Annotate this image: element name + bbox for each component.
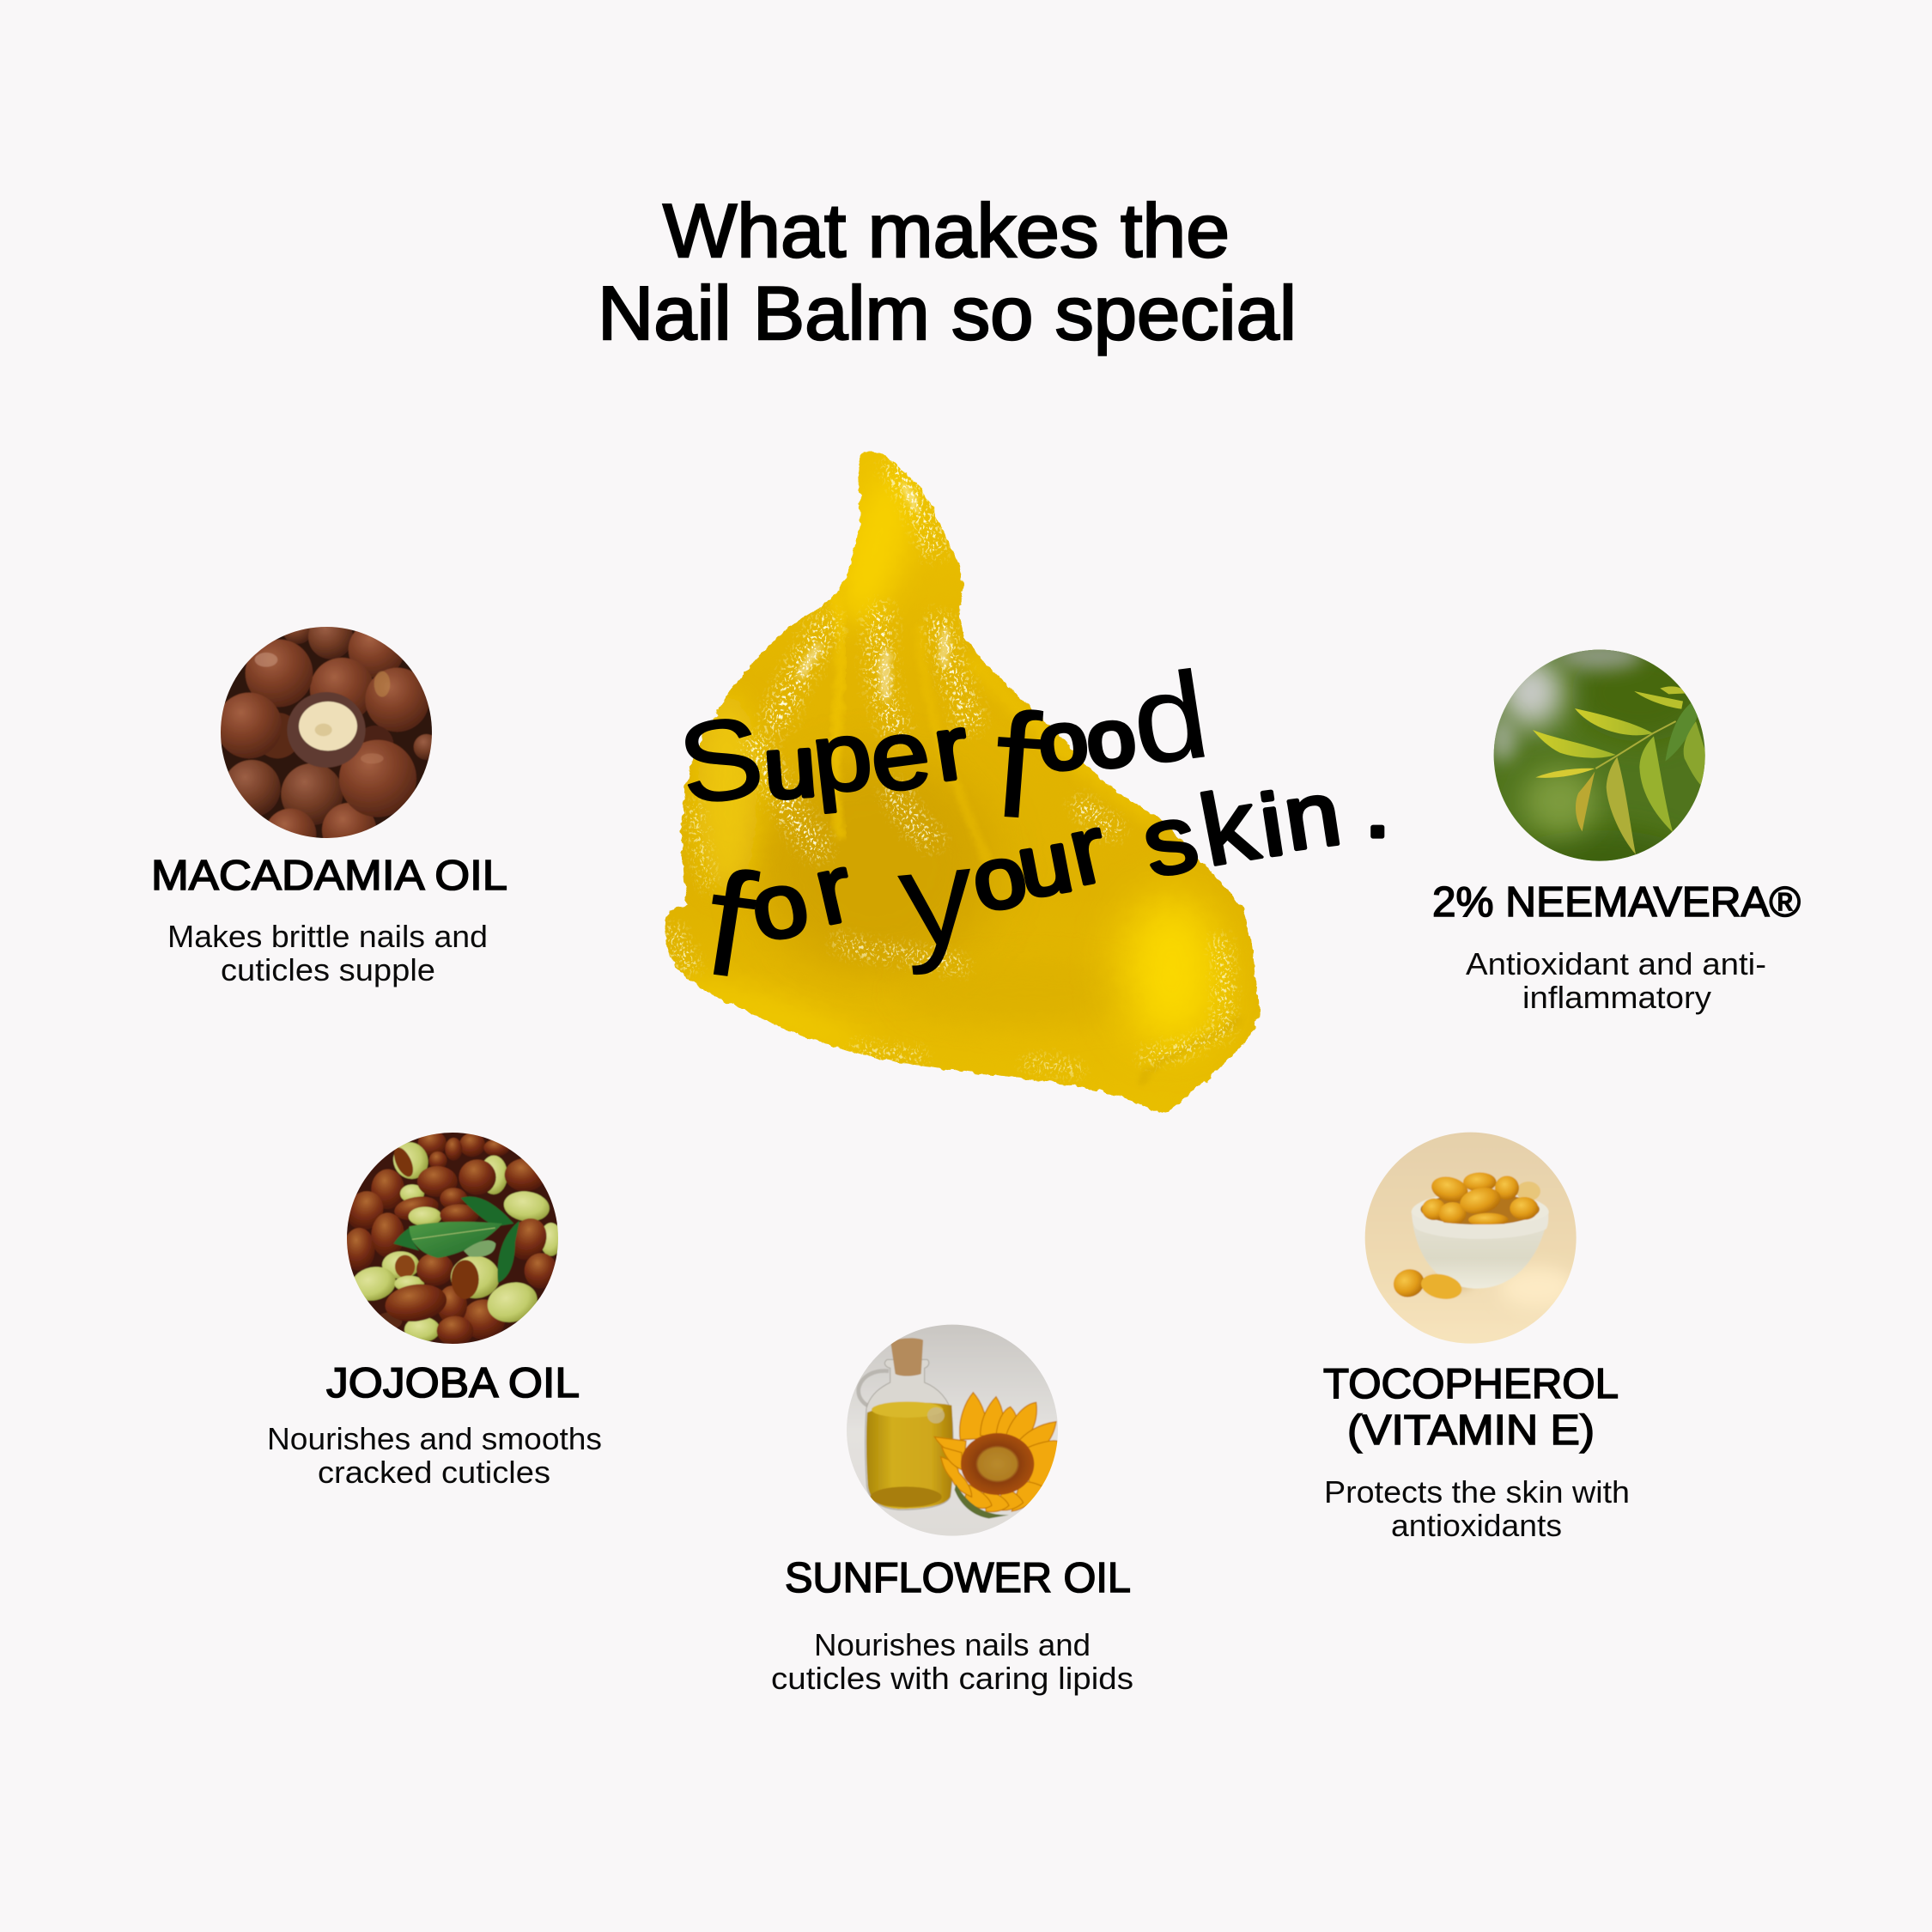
description: cuticles supple [221, 952, 435, 987]
description: Antioxidant and anti- [1466, 946, 1766, 981]
title: Nail Balm so special [598, 270, 1297, 355]
handwritten slogan: for your skin.: i [1255, 776, 1290, 874]
description: Protects the skin with [1324, 1474, 1630, 1510]
description [1324, 1474, 1630, 1543]
title [598, 188, 1297, 355]
description [771, 1627, 1133, 1696]
heading: JOJOBA OIL [326, 1360, 580, 1406]
heading: MACADAMIA OIL [151, 853, 507, 899]
handwritten slogan: Superfood: d [1122, 645, 1217, 791]
handwritten slogan: for your skin.: o [964, 827, 1034, 930]
photo: neem leaves [1494, 649, 1705, 861]
heading [1323, 1361, 1619, 1454]
title: What makes the [663, 188, 1230, 273]
handwritten slogan: for your skin.: r [1058, 794, 1116, 905]
photo: vitamin E capsules in bowl [1363, 1131, 1580, 1348]
handwritten slogan: Superfood: f [987, 680, 1046, 851]
handwritten slogan: Superfood: S [671, 693, 771, 829]
heading: SUNFLOWER OIL [785, 1555, 1131, 1601]
handwritten slogan: Superfood: u [761, 718, 820, 817]
handwritten slogan: Superfood: o [1034, 696, 1092, 787]
handwritten slogan: for your skin.: n [1278, 762, 1347, 869]
handwritten slogan: for your skin.: u [1010, 813, 1079, 916]
handwritten slogan: for your skin.: s [1133, 782, 1207, 897]
description [1466, 946, 1766, 1015]
description: Nourishes and smooths [267, 1421, 602, 1456]
balm swatch [665, 452, 1261, 1113]
description: antioxidants [1391, 1508, 1562, 1543]
handwritten slogan: for your skin.: k [1191, 768, 1266, 887]
handwritten slogan: for your skin.: . [1364, 759, 1390, 855]
photo: jojoba fruits [339, 1131, 562, 1348]
photo: oil bottle and sunflower [844, 1322, 1062, 1540]
handwritten slogan: Superfood: e [862, 698, 938, 813]
panel: tocopherol [1323, 1131, 1630, 1543]
description [167, 919, 488, 987]
heading: (VITAMIN E) [1347, 1407, 1595, 1454]
panel: sunflower oil [771, 1322, 1133, 1696]
handwritten slogan: for your skin.: r [805, 834, 862, 945]
handwritten slogan: for your skin.: y [891, 818, 982, 977]
description: cuticles with caring lipids [771, 1661, 1133, 1696]
panel: macadamia oil [151, 612, 507, 987]
handwritten slogan: for your skin.: o [743, 852, 816, 960]
photo: macadamia nuts [221, 627, 432, 838]
heading: TOCOPHEROL [1323, 1361, 1619, 1407]
handwritten slogan: Superfood: r [927, 697, 975, 799]
description [267, 1421, 602, 1490]
description: Makes brittle nails and [167, 919, 488, 954]
handwritten slogan: Superfood: p [806, 701, 878, 814]
description: inflammatory [1522, 980, 1711, 1015]
balm swatch with handwritten slogan [665, 452, 1384, 1113]
heading: 2% NEEMAVERA® [1432, 879, 1801, 926]
description: Nourishes nails and [814, 1627, 1091, 1662]
description: cracked cuticles [318, 1455, 550, 1490]
panel: jojoba oil [267, 1131, 602, 1490]
panel: neemavera [1432, 641, 1801, 1015]
handwritten slogan: Superfood: o [1082, 693, 1139, 785]
handwritten slogan: for your skin.: f [695, 838, 765, 1010]
